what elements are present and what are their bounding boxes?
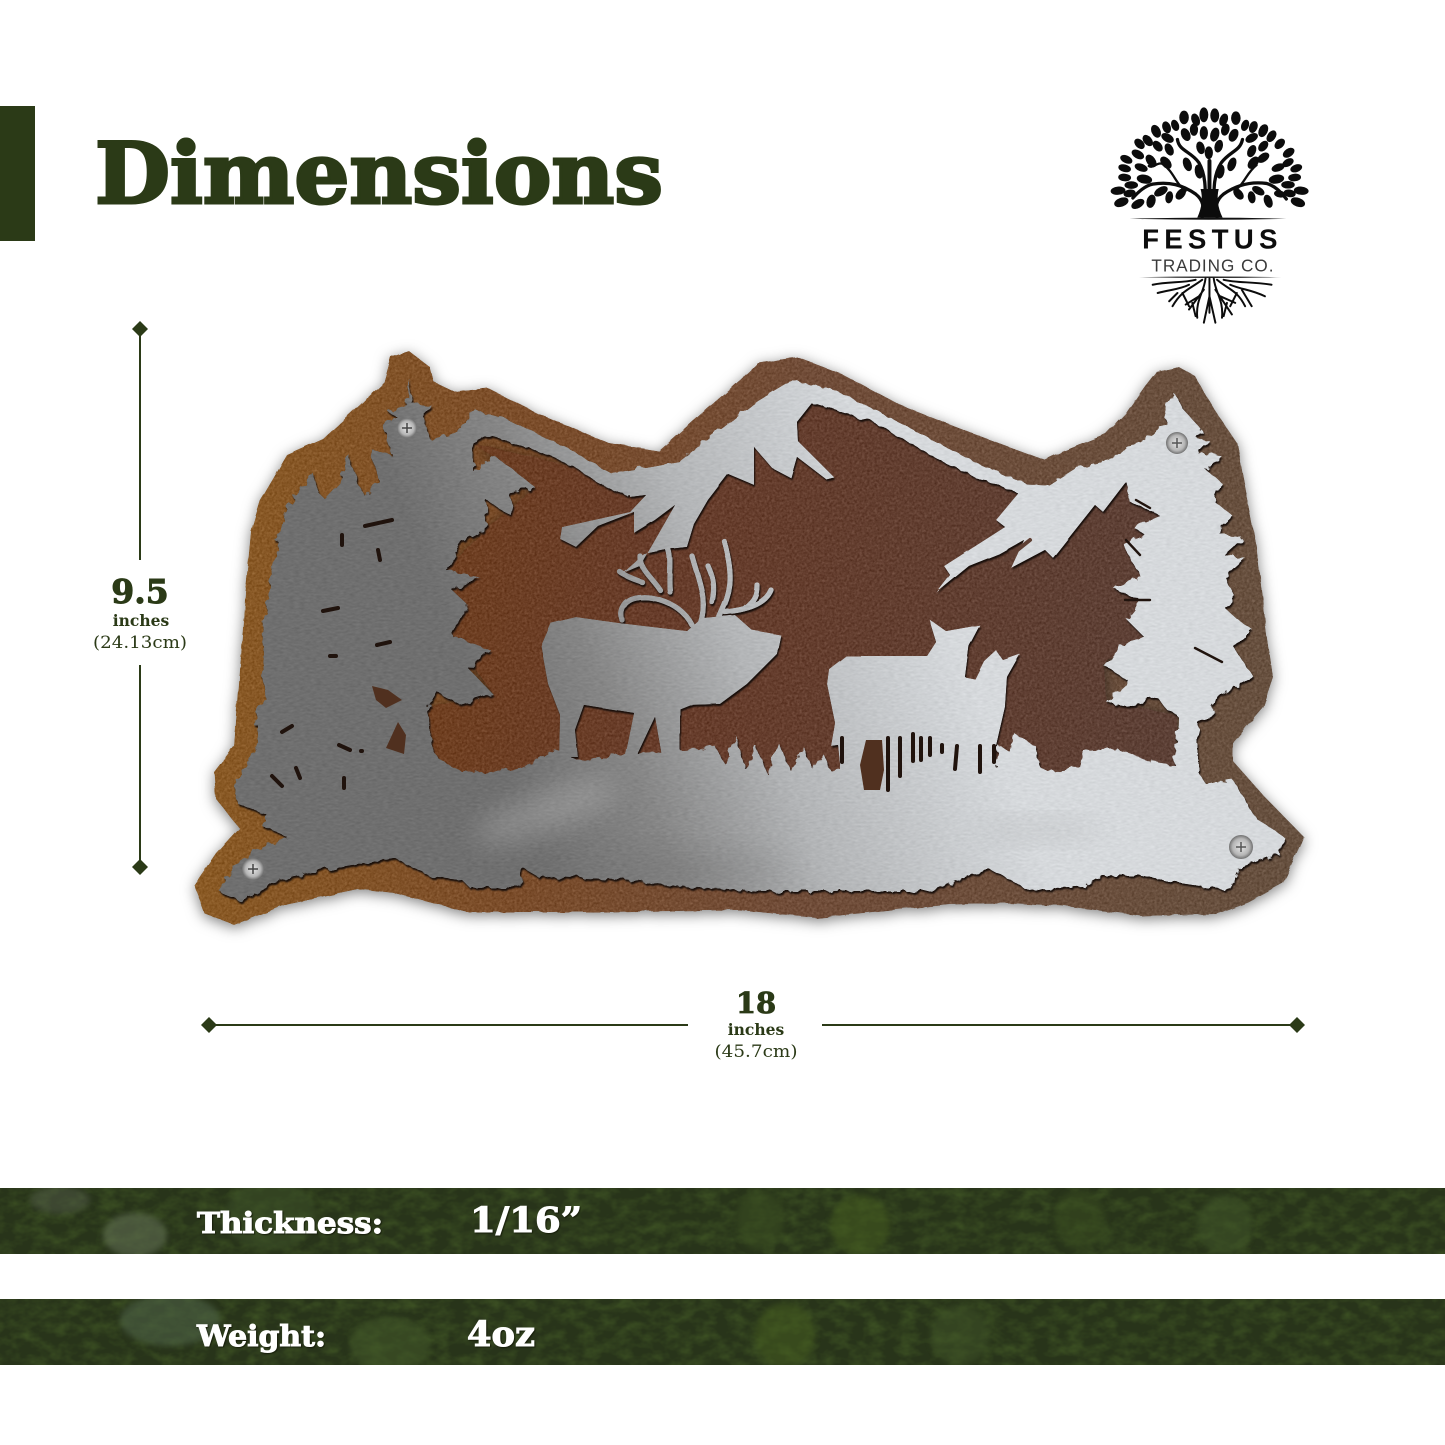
silver cutout scene <box>219 376 1284 901</box>
value thickness: 1/16” <box>470 1200 582 1241</box>
band: weight <box>0 1299 1445 1365</box>
holes and grass slots <box>272 500 1222 790</box>
label thickness: Thickness: <box>197 1206 383 1240</box>
metal light reflections <box>468 768 1100 886</box>
rust window behind the scene <box>428 395 1177 795</box>
rust-coloured cutouts <box>372 686 884 790</box>
metal: snow on central peak <box>559 380 835 581</box>
logo divider top <box>1130 218 1286 220</box>
height line lower <box>139 665 141 867</box>
cow and calf <box>827 619 1020 785</box>
shadow: lower ground <box>712 864 754 876</box>
logo tagline: TRADING CO. <box>1151 256 1273 276</box>
screw: bottom left <box>242 858 264 880</box>
width line right <box>822 1024 1297 1026</box>
screw: top right <box>1166 432 1188 454</box>
height marker top <box>132 321 148 337</box>
highlight: ground streak <box>477 776 611 849</box>
value weight: 4oz <box>467 1314 535 1355</box>
height value: 9.5 <box>111 572 169 611</box>
logo tree trunk and branches <box>1133 140 1286 217</box>
logo divider bottom <box>1139 276 1281 278</box>
rusted backing plate <box>194 351 1304 925</box>
band: thickness <box>0 1188 1445 1254</box>
width metric: (45.7cm) <box>714 1042 798 1062</box>
logo roots <box>1153 278 1272 323</box>
width unit: inches <box>728 1020 784 1039</box>
height marker bottom <box>132 859 148 875</box>
forest texture band two <box>0 1299 1445 1365</box>
logo tree leaves <box>1111 108 1308 210</box>
height dimension <box>93 321 187 875</box>
title: Dimensions <box>95 124 663 223</box>
height line upper <box>139 329 141 560</box>
width marker right <box>1289 1017 1305 1033</box>
label weight: Weight: <box>196 1319 326 1353</box>
logo: Festus Trading Co. <box>1111 108 1308 323</box>
width marker left <box>201 1017 217 1033</box>
height unit: inches <box>113 611 169 630</box>
accent bar <box>0 106 35 241</box>
metal: trees ridge and ground <box>219 376 1284 901</box>
height metric: (24.13cm) <box>93 633 187 653</box>
product: metal elk plaque <box>194 351 1304 925</box>
screw: bottom right <box>1229 835 1253 859</box>
forest texture band one <box>0 1188 1445 1254</box>
elk <box>541 615 781 757</box>
shadow: right ground smudge <box>1020 823 1066 837</box>
width dimension <box>201 986 1305 1062</box>
width line left <box>209 1024 688 1026</box>
metal: snow on right peak <box>936 468 1126 593</box>
logo name: FESTUS <box>1142 223 1277 254</box>
logo trunk base <box>1197 189 1223 218</box>
screw: top left <box>397 418 417 438</box>
elk antlers <box>620 541 771 625</box>
width value: 18 <box>736 986 776 1020</box>
